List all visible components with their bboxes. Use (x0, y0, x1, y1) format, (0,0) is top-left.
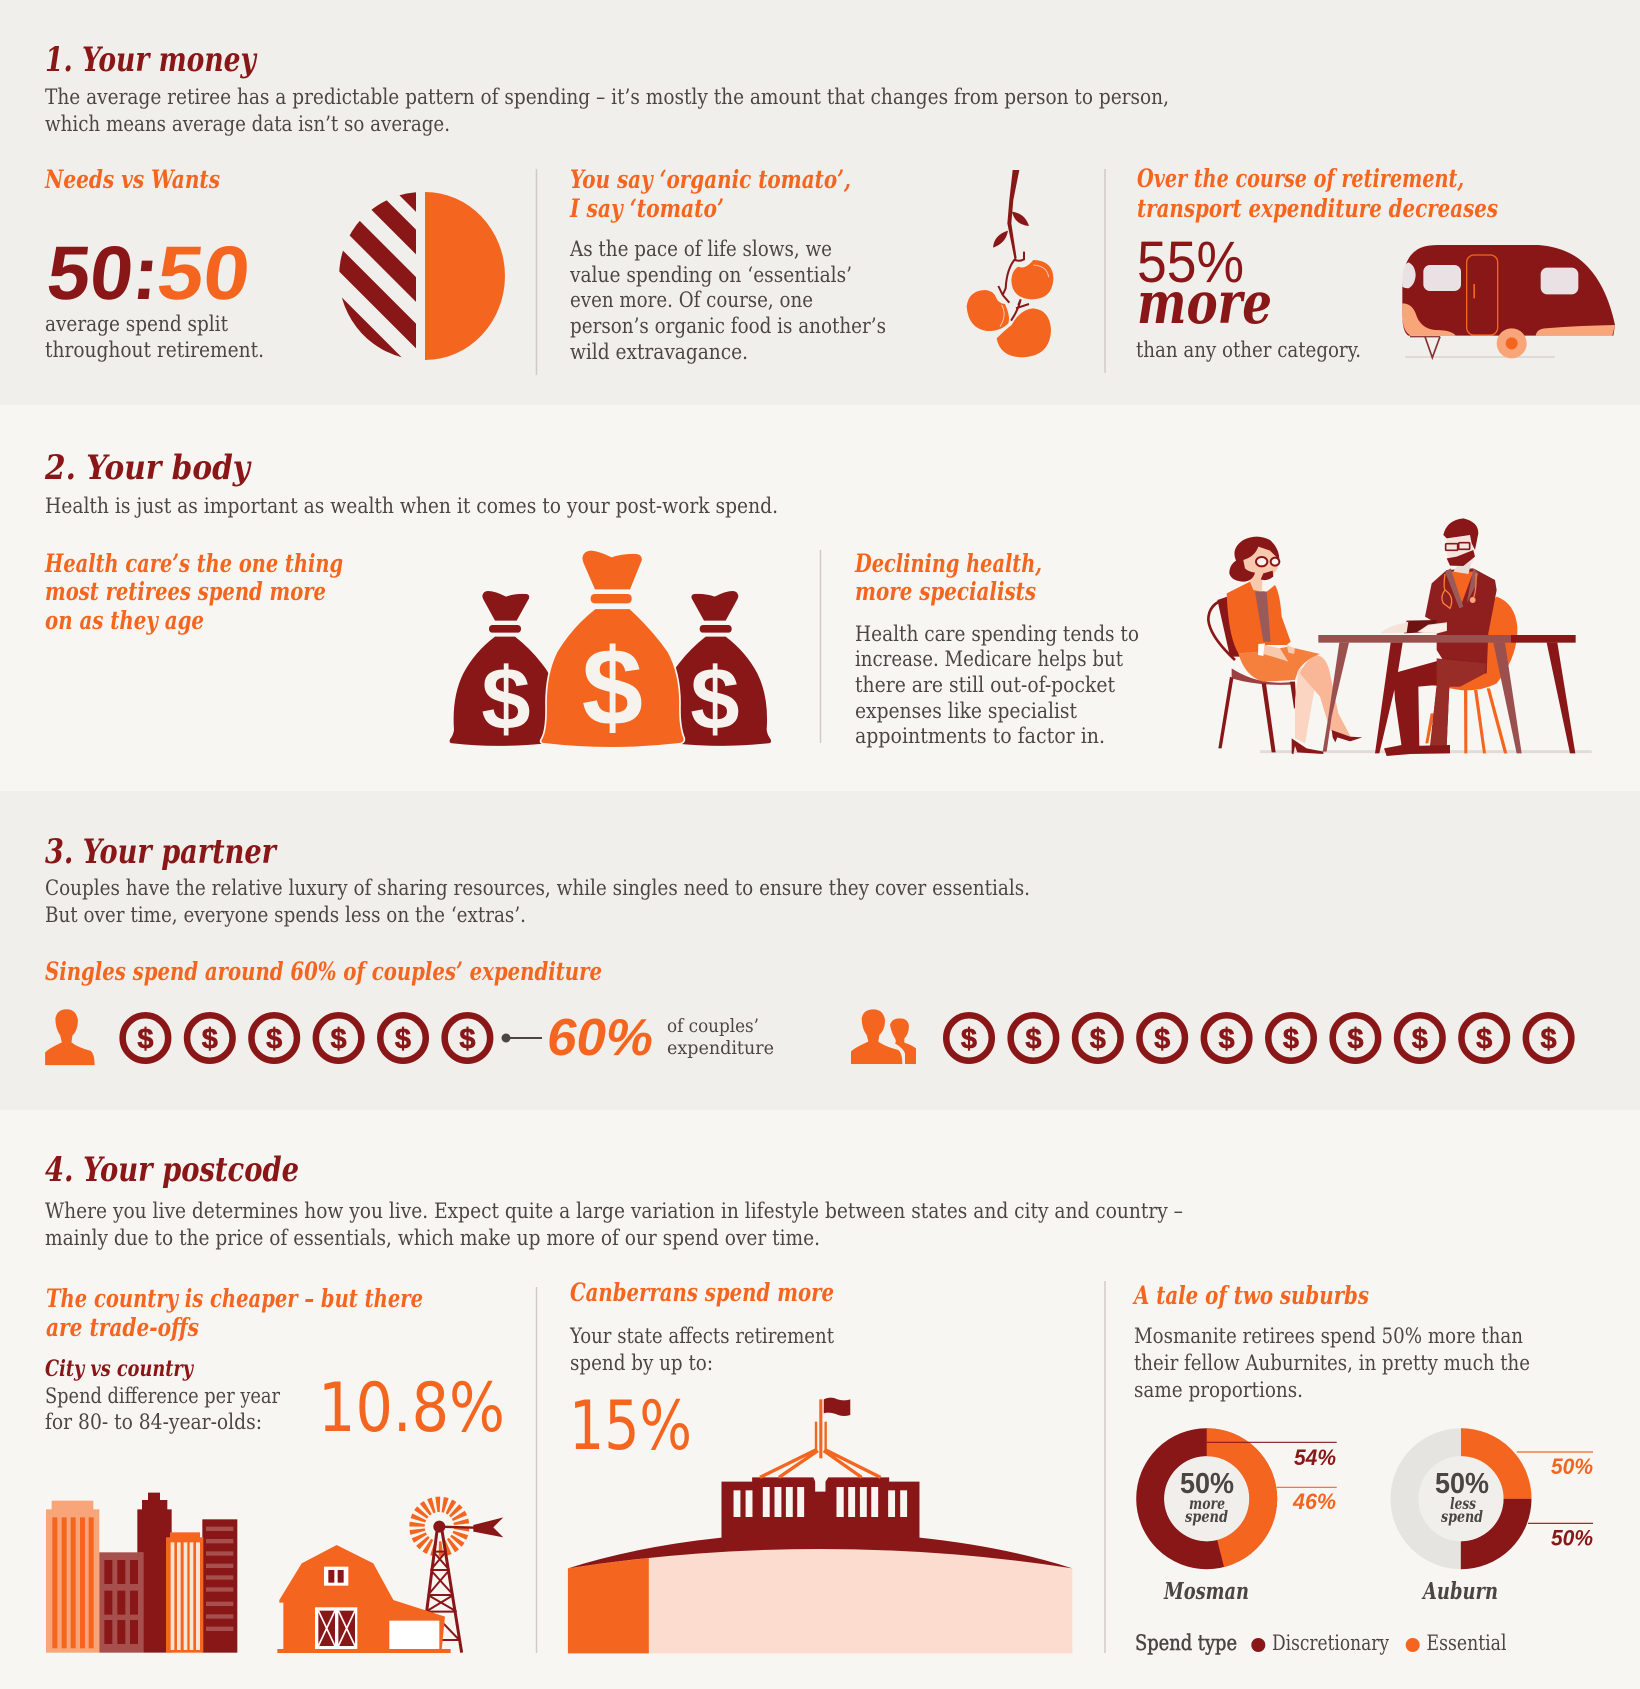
icon: centre money bag: $ (582, 626, 643, 749)
subheading: canberrans: Canberrans spend more (570, 1278, 834, 1307)
intro text: your postcode: Where you live determines how you live. Expect quite a large variation in lifestyle between states and city and country – (45, 1199, 1183, 1223)
subheading: health care (44, 549, 343, 635)
text block: mosmanite retirees (1134, 1324, 1530, 1402)
donut chart: Auburn: spend (1441, 1507, 1483, 1526)
icon: centre money bag (541, 551, 684, 749)
stat: 55% more (1136, 230, 1361, 362)
intro text: your body: Health is just as important as wealth when it comes to your post-work spend. (45, 494, 778, 518)
icon: money bags (450, 551, 771, 749)
illustration: city and barn (46, 1493, 503, 1653)
icons: six dollar coins: $ (266, 1024, 282, 1056)
text block: mosmanite retirees: Mosmanite retirees spend 50% more than (1134, 1324, 1523, 1348)
connector line (502, 1034, 542, 1042)
legend: spend type: Essential (1426, 1631, 1506, 1655)
donut chart: Mosman: spend (1185, 1507, 1228, 1526)
heading: your money: 1. Your money (45, 40, 258, 80)
intro text: your postcode (45, 1199, 1183, 1250)
caption: average spend split: throughout retirement. (45, 338, 264, 362)
donut chart: Mosman: 50% (1180, 1468, 1234, 1500)
donut chart: Auburn: 50% (1435, 1468, 1489, 1500)
icon: half striped half solid pie (339, 192, 505, 360)
icons: ten dollar coins: $ (1476, 1024, 1492, 1056)
donut chart: Auburn: 50% (1551, 1454, 1593, 1479)
panel: your money (44, 46, 1615, 375)
caption: of couples' expenditure: expenditure (667, 1037, 774, 1059)
text block: pace of life (569, 237, 886, 364)
subheading: health care: most retirees spend more (45, 577, 326, 606)
text block: pace of life: even more. Of course, one (570, 288, 813, 312)
illustration: doctor (1380, 518, 1497, 756)
icons: ten dollar coins: $ (1283, 1024, 1299, 1056)
text block: health care spending: expenses like specialist (855, 699, 1077, 723)
text block: your state: spend by up to: (570, 1351, 713, 1375)
legend: spend type: Spend type (1135, 1631, 1237, 1655)
donut chart: Mosman: 54% (1294, 1445, 1336, 1470)
subheading: singles spend: Singles spend around 60% of couples’ expenditure (45, 957, 602, 986)
text block: health care spending: increase. Medicare helps but (855, 647, 1123, 671)
text block: mosmanite retirees: same proportions. (1134, 1378, 1303, 1402)
icon: left money bag: $ (481, 649, 531, 748)
stat: 60%: 60% (547, 1009, 653, 1067)
icons: ten dollar coins: $ (1541, 1024, 1557, 1056)
heading: your partner: 3. Your partner (45, 832, 278, 872)
donut chart: Mosman: 46% (1292, 1489, 1336, 1514)
icon: single person (45, 1009, 95, 1065)
subheading: declining health: more specialists (855, 577, 1036, 606)
subheading: country is cheaper: The country is cheaper – but there (46, 1284, 423, 1313)
icon: right money bag: $ (690, 649, 740, 748)
label: Auburn: Auburn (1421, 1578, 1498, 1605)
caption: average spend split (45, 312, 264, 362)
icons: ten dollar coins: $ (1219, 1024, 1235, 1056)
caption: average spend split: average spend split (45, 312, 228, 336)
heading: your postcode: 4. Your postcode (45, 1150, 299, 1190)
text block: your state (569, 1324, 834, 1375)
text block: city vs country: for 80- to 84-year-olds: (45, 1410, 262, 1434)
stat: 15%: 15% (569, 1387, 692, 1466)
intro text: your money: which means average data isn’t so average. (45, 112, 450, 136)
stat: 50:50: 50 (153, 231, 254, 316)
subheading: health care: Health care’s the one thing (44, 549, 343, 578)
text block: city vs country (45, 1356, 281, 1434)
panel: your body (0, 405, 1640, 791)
subheading: transport expenditure: transport expenditure decreases (1137, 194, 1498, 223)
illustration: barn and windmill (277, 1504, 503, 1653)
text block: city vs country: Spend difference per year (45, 1384, 281, 1408)
donut chart: Mosman (1150, 1442, 1337, 1555)
subheading: organic tomato (569, 165, 851, 223)
icons: ten dollar coins (946, 1015, 1571, 1061)
text block: pace of life: wild extravagance. (570, 340, 748, 364)
donut chart: Mosman: more (1189, 1494, 1225, 1513)
subheading: transport expenditure (1137, 164, 1498, 223)
stat: 10.8%: 10.8% (318, 1369, 505, 1448)
icon: couple (851, 1009, 916, 1064)
caption: of couples' expenditure (667, 1015, 774, 1059)
illustration: woman (1227, 537, 1362, 754)
subheading: transport expenditure: Over the course of retirement, (1137, 164, 1464, 193)
subheading: health care: on as they age (45, 606, 204, 635)
illustration: patient and doctor at table (1208, 518, 1592, 756)
donut chart: Auburn (1404, 1442, 1593, 1555)
illustration: hill (568, 1549, 1072, 1653)
text block: mosmanite retirees: their fellow Auburnites, in pretty much the (1134, 1351, 1530, 1375)
stat: 55% more: 55% (1137, 230, 1244, 295)
illustration: doctor's chair (1425, 597, 1517, 753)
icons: ten dollar coins: $ (961, 1024, 977, 1056)
icons: ten dollar coins: $ (1412, 1024, 1428, 1056)
illustration: city skyline (46, 1493, 237, 1653)
text block: health care spending: there are still out-of-pocket (855, 673, 1115, 697)
text block: health care spending: Health care spending tends to (855, 622, 1139, 646)
intro text: your partner: But over time, everyone spends less on the ‘extras’. (45, 903, 526, 927)
intro text: your partner (45, 876, 1030, 927)
text block: pace of life: As the pace of life slows, we (569, 237, 832, 261)
panel: your postcode (0, 1110, 1640, 1689)
icons: six dollar coins: $ (202, 1024, 218, 1056)
text block: pace of life: value spending on ‘essentials’ (569, 263, 852, 287)
illustration: building (568, 1398, 1072, 1568)
illustration: parliament house on hill (568, 1398, 1072, 1653)
heading: your body: 2. Your body (44, 448, 252, 488)
panel: your partner (0, 791, 1640, 1110)
icon: caravan (1402, 245, 1615, 358)
stat: 55% more: more (1137, 269, 1272, 337)
icons: six dollar coins: $ (331, 1024, 347, 1056)
stat: 50:50: 50: (43, 231, 163, 316)
icons: ten dollar coins: $ (1347, 1024, 1363, 1056)
legend: spend type (1135, 1631, 1506, 1655)
icon: right money bag (671, 591, 771, 748)
illustration: woman's chair (1208, 597, 1297, 752)
text block: pace of life: person’s organic food is another’s (570, 314, 886, 338)
stat: 50:50 (43, 231, 254, 316)
intro text: your postcode: mainly due to the price of essentials, which make up more of our spend over time. (45, 1226, 820, 1250)
text block: your state: Your state affects retirement (569, 1324, 834, 1348)
intro text: your partner: Couples have the relative luxury of sharing resources, while singles need to ensure they cover essentials. (45, 876, 1030, 900)
subheading: tale of two suburbs: A tale of two suburbs (1132, 1281, 1369, 1310)
text block: health care spending (855, 622, 1139, 748)
stat: 55% more: than any other category. (1136, 338, 1361, 362)
intro text: your money (45, 85, 1169, 136)
subheading: needs vs wants: Needs vs Wants (44, 165, 220, 194)
icons: six dollar coins (123, 1015, 490, 1061)
legend: spend type: Discretionary (1272, 1631, 1389, 1655)
illustration: table (1318, 635, 1576, 753)
icons: ten dollar coins: $ (1025, 1024, 1041, 1056)
text block: city vs country: City vs country (45, 1356, 194, 1382)
icons: six dollar coins: $ (137, 1024, 153, 1056)
text block: health care spending: appointments to factor in. (855, 724, 1105, 748)
caption: of couples' expenditure: of couples’ (667, 1015, 759, 1037)
subheading: organic tomato: You say ‘organic tomato’, (570, 165, 851, 194)
icon: left money bag (450, 591, 550, 748)
donut chart: Auburn: less (1450, 1494, 1476, 1513)
subheading: declining health (854, 549, 1042, 606)
icons: six dollar coins: $ (459, 1024, 475, 1056)
icons: ten dollar coins: $ (1154, 1024, 1170, 1056)
icons: six dollar coins: $ (395, 1024, 411, 1056)
subheading: organic tomato: I say ‘tomato’ (569, 194, 724, 223)
icon: tomato vine (967, 170, 1053, 357)
subheading: country is cheaper (46, 1284, 423, 1342)
subheading: declining health: Declining health, (854, 549, 1042, 578)
donut chart: Auburn: 50% (1551, 1526, 1593, 1550)
intro text: your money: The average retiree has a predictable pattern of spending – it’s mostly the amount that changes from person to person, (45, 85, 1169, 109)
icons: ten dollar coins: $ (1090, 1024, 1106, 1056)
subheading: country is cheaper: are trade-offs (46, 1313, 199, 1342)
label: Mosman: Mosman (1163, 1578, 1249, 1605)
